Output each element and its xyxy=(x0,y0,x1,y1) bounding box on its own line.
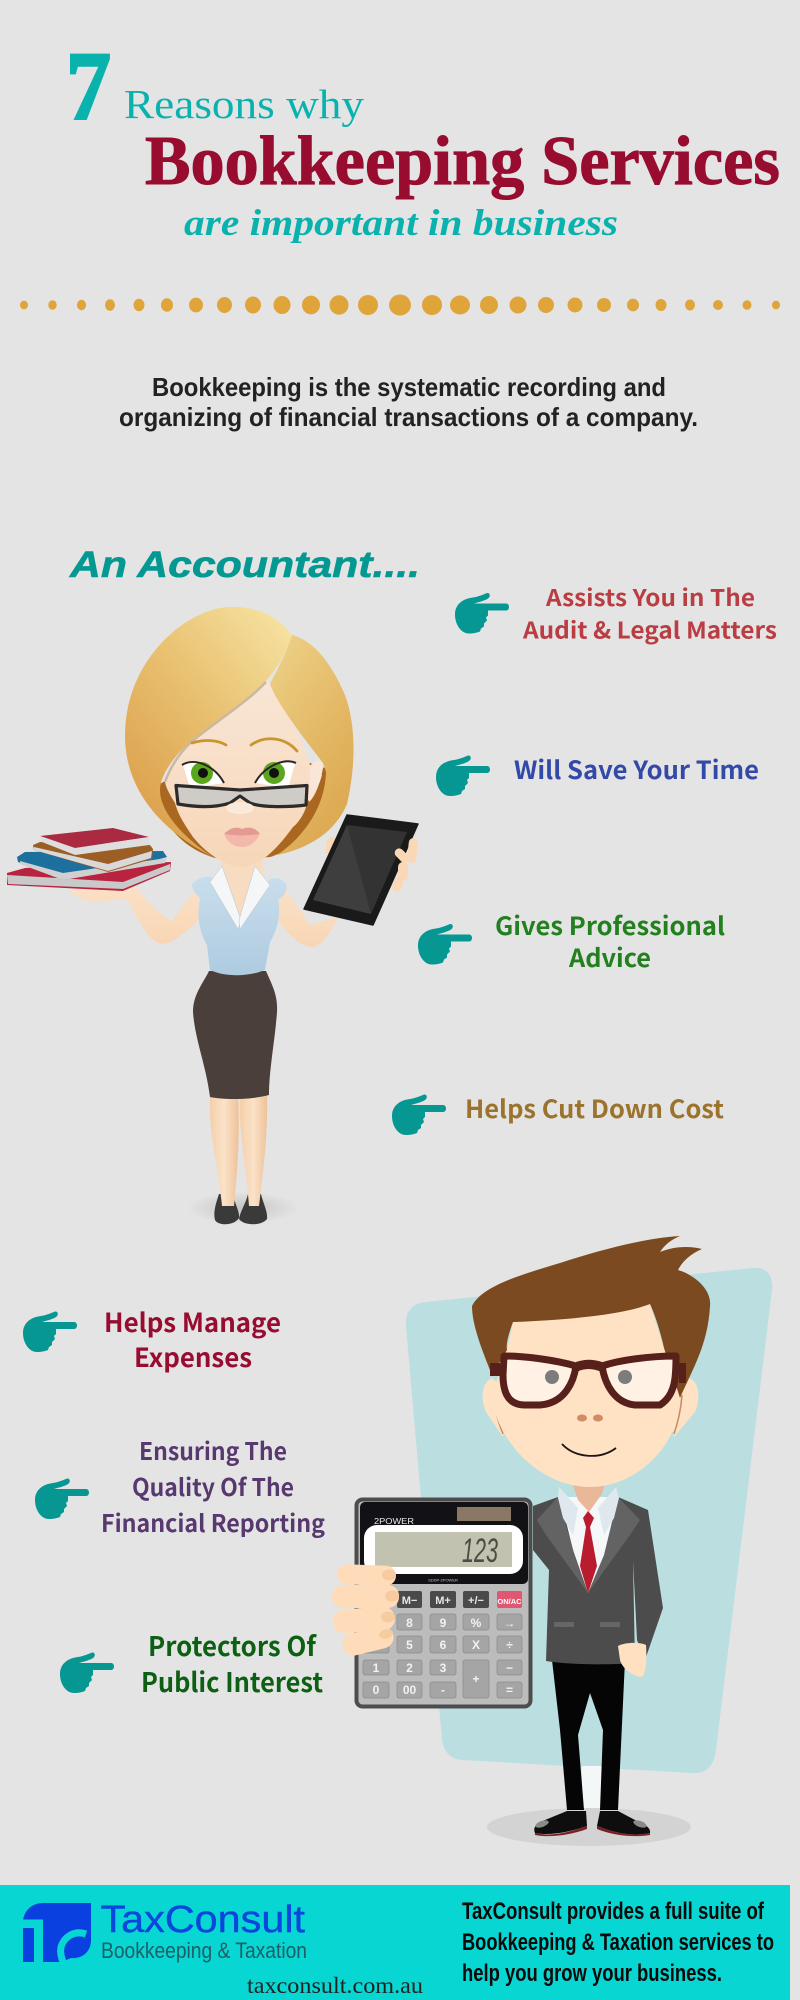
icon: pointing hand xyxy=(392,1094,446,1135)
buttons grid: → xyxy=(504,1616,516,1630)
logo tagline: Bookkeeping & Taxation xyxy=(101,1938,307,1963)
buttons grid: - xyxy=(441,1683,445,1697)
calculator xyxy=(356,1500,530,1706)
glasses xyxy=(176,786,307,807)
stack of books xyxy=(7,828,171,891)
teal backdrop panel xyxy=(406,1268,772,1773)
floor shadow xyxy=(187,1192,299,1224)
buttons grid: 0 xyxy=(373,1683,380,1697)
LCD xyxy=(375,1532,512,1567)
pupils xyxy=(545,1370,632,1384)
buttons row 1: M− xyxy=(402,1595,417,1607)
collar xyxy=(210,866,270,929)
buttons grid: 8 xyxy=(406,1616,413,1630)
suit jacket xyxy=(533,1497,663,1664)
neck xyxy=(571,1480,606,1512)
item label: Helps Manage xyxy=(104,1303,281,1340)
skirt xyxy=(193,971,277,1099)
item label: Will Save Your Time xyxy=(514,751,759,787)
hand holding calculator xyxy=(332,1564,399,1658)
hair left lobe shadow edge xyxy=(165,682,266,782)
shoes xyxy=(214,1194,267,1224)
hair xyxy=(472,1236,710,1398)
icon: pointing hand xyxy=(455,593,509,634)
intro text: Bookkeeping is the systematic recording and xyxy=(152,372,666,402)
back hair xyxy=(158,740,331,860)
top red book xyxy=(40,828,149,848)
item: Ensuring The Quality Of The Financial Reporting xyxy=(35,1432,325,1539)
title xyxy=(66,33,780,244)
ear xyxy=(309,761,323,802)
shoes xyxy=(534,1811,650,1836)
buttons grid: 1 xyxy=(373,1661,380,1675)
white gap between legs xyxy=(582,1766,602,1808)
item label: Gives Professional xyxy=(495,907,725,943)
title numeral 7: 7 xyxy=(66,33,111,141)
item label: Audit & Legal Matters xyxy=(522,612,777,646)
buttons grid: + xyxy=(472,1672,480,1686)
shirt xyxy=(560,1497,616,1593)
fingers over tablet xyxy=(391,838,418,893)
tablet xyxy=(304,815,418,925)
footer background xyxy=(0,1885,790,2000)
thumb behind tablet xyxy=(325,837,337,858)
item: Protectors Of Public Interest xyxy=(60,1625,323,1700)
item label: Protectors Of xyxy=(148,1625,317,1664)
buttons row 1: +/− xyxy=(468,1595,484,1607)
intro text: organizing of financial transactions of a company. xyxy=(119,402,698,432)
footer band xyxy=(0,1885,790,2000)
illustration: woman accountant xyxy=(7,607,418,1224)
item label: Advice xyxy=(568,939,651,975)
icon: pointing hand xyxy=(23,1311,77,1352)
buttons grid: 5 xyxy=(406,1638,413,1652)
icon: pointing hand xyxy=(418,924,472,964)
nose xyxy=(226,802,254,814)
buttons grid: 3 xyxy=(440,1661,447,1675)
buttons grid: 4 xyxy=(373,1638,380,1652)
smile xyxy=(562,1444,616,1456)
tablet screen xyxy=(313,825,407,914)
legs xyxy=(210,1095,267,1206)
buttons grid: 7 xyxy=(373,1616,380,1630)
logo name: TaxConsult xyxy=(100,1899,305,1941)
logo mark xyxy=(23,1903,91,1964)
collar xyxy=(558,1487,619,1535)
calculator body xyxy=(356,1500,530,1706)
icon: pointing hand xyxy=(436,755,490,796)
buttons grid: X xyxy=(472,1638,480,1652)
title line: Reasons why: Reasons why xyxy=(124,81,365,127)
buttons grid: % xyxy=(471,1616,482,1630)
blue book xyxy=(17,851,167,880)
buttons grid: 2 xyxy=(406,1661,413,1675)
item label: Public Interest xyxy=(141,1661,323,1700)
item label: Quality Of The xyxy=(132,1468,294,1503)
item label: Expenses xyxy=(134,1338,252,1375)
ears xyxy=(483,1378,698,1437)
solar strip xyxy=(457,1507,511,1521)
brown book xyxy=(33,842,153,872)
item label xyxy=(101,1432,325,1539)
jacket pockets xyxy=(554,1622,620,1627)
item: Helps Cut Down Cost xyxy=(392,1090,724,1135)
buttons row 1: M+ xyxy=(435,1595,451,1607)
icon: pointing hand xyxy=(60,1652,114,1693)
lapels xyxy=(537,1497,640,1593)
buttons grid: − xyxy=(506,1661,513,1675)
buttons row 1: ON/AC xyxy=(497,1597,522,1606)
buttons grid: 6 xyxy=(440,1638,447,1652)
LCD digits: 123 xyxy=(462,1532,498,1570)
tablet body xyxy=(304,815,418,925)
item label: Ensuring The xyxy=(139,1432,287,1467)
neck and chest xyxy=(212,855,268,930)
hair left lobe xyxy=(125,607,292,857)
footer description xyxy=(462,1898,774,1987)
buttons grid: 9 xyxy=(440,1616,447,1630)
nose xyxy=(577,1414,603,1422)
item label xyxy=(495,907,725,975)
item: Helps Manage Expenses xyxy=(23,1303,281,1375)
blouse xyxy=(192,877,287,975)
item label: Helps Cut Down Cost xyxy=(465,1090,724,1126)
brand text: 2POWER xyxy=(374,1516,414,1526)
item: Assists You in The Audit & Legal Matters xyxy=(455,579,777,646)
item label xyxy=(104,1303,281,1375)
trousers xyxy=(552,1660,625,1810)
model text: SDDP-2POWER xyxy=(428,1578,458,1582)
lips xyxy=(224,828,260,847)
buttons grid: 00 xyxy=(403,1683,416,1697)
left arm holding books xyxy=(70,887,206,944)
hand on hip xyxy=(618,1643,646,1677)
title line: Bookkeeping Services: Bookkeeping Services xyxy=(145,123,780,200)
icon: pointing hand xyxy=(35,1478,89,1519)
dotted divider xyxy=(20,294,780,316)
item: Gives Professional Advice xyxy=(418,907,725,975)
hair right lobe xyxy=(270,635,354,855)
intro text xyxy=(119,372,698,432)
item label xyxy=(522,579,777,646)
heading: An Accountant: An Accountant.... xyxy=(69,544,420,585)
buttons grid xyxy=(363,1614,522,1698)
footer description: help you grow your business. xyxy=(462,1960,722,1987)
item label: Financial Reporting xyxy=(101,1504,325,1539)
website: taxconsult.com.au xyxy=(247,1973,424,1998)
display frame xyxy=(364,1525,523,1574)
face xyxy=(492,1304,680,1487)
eyes xyxy=(182,761,296,788)
illustration: man with calculator xyxy=(332,1236,772,1846)
tie xyxy=(580,1511,597,1593)
buttons row 1 xyxy=(363,1591,522,1608)
floor shadow xyxy=(487,1808,691,1846)
top panel xyxy=(360,1502,528,1584)
title line: are important in business: are important in business xyxy=(184,203,618,244)
buttons grid: = xyxy=(506,1683,513,1697)
eyebrows xyxy=(192,739,297,751)
item label xyxy=(141,1625,323,1700)
item label: Assists You in The xyxy=(545,579,755,613)
right arm holding tablet xyxy=(274,888,338,947)
item: Will Save Your Time xyxy=(436,751,759,796)
bottom red book xyxy=(7,862,171,891)
glasses xyxy=(490,1356,686,1405)
face xyxy=(165,680,322,867)
buttons grid: ÷ xyxy=(506,1638,513,1652)
